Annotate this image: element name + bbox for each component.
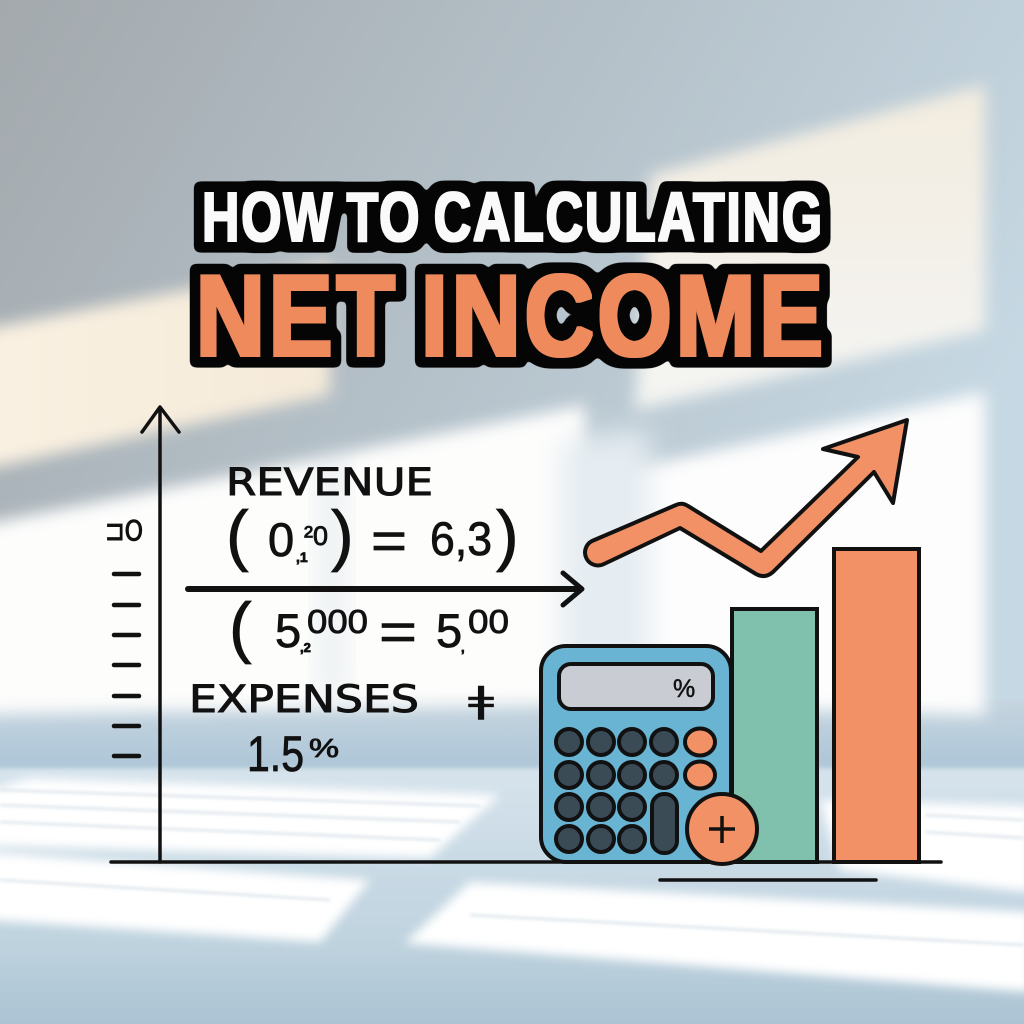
axis tick marks	[114, 574, 139, 756]
calculator body	[541, 646, 731, 862]
revenue formula: (	[226, 497, 249, 573]
bar: orange	[834, 549, 919, 862]
revenue formula: )	[331, 497, 354, 573]
revenue formula: ²0	[304, 521, 328, 551]
bar: teal	[732, 609, 817, 862]
lower rule	[660, 878, 876, 882]
revenue label: REVENUE	[226, 461, 433, 504]
screen percent sign: %	[673, 675, 695, 703]
title line 2: NET INCOME	[196, 253, 827, 380]
title	[196, 178, 827, 380]
expenses formula: ,	[461, 640, 465, 655]
expense percentage: 1.5	[247, 726, 304, 782]
expenses formula: 5	[436, 604, 462, 657]
calculator screen	[559, 664, 713, 709]
revenue formula: )	[496, 497, 519, 573]
calculator keys	[556, 729, 677, 853]
not-equal style symbol: ǂ	[468, 680, 495, 721]
expenses formula: 5	[275, 604, 301, 657]
expenses formula: 00	[468, 603, 509, 640]
expenses formula: (	[229, 589, 252, 665]
revenue formula: ,1	[296, 549, 308, 565]
plus badge	[687, 794, 757, 864]
revenue formula: 0	[268, 513, 294, 566]
horizontal arrow divider	[188, 573, 582, 605]
expenses formula: 000	[307, 603, 368, 640]
revenue formula: =	[371, 511, 407, 571]
expense percentage: %	[309, 733, 339, 763]
baseline	[111, 860, 941, 864]
expenses formula: ,2	[300, 640, 311, 655]
expenses formula: =	[379, 602, 417, 662]
expenses label: EXPENSES	[189, 678, 419, 721]
orange keys	[685, 728, 715, 788]
growth arrow	[585, 420, 907, 576]
title line 1: HOW TO CALCULATING	[202, 178, 824, 256]
vertical axis with arrow	[142, 407, 179, 862]
revenue formula	[226, 497, 519, 573]
expenses formula	[229, 589, 509, 665]
axis label: ⊐O	[105, 514, 143, 547]
calculator	[541, 646, 731, 862]
revenue formula: 6,3	[430, 512, 492, 565]
